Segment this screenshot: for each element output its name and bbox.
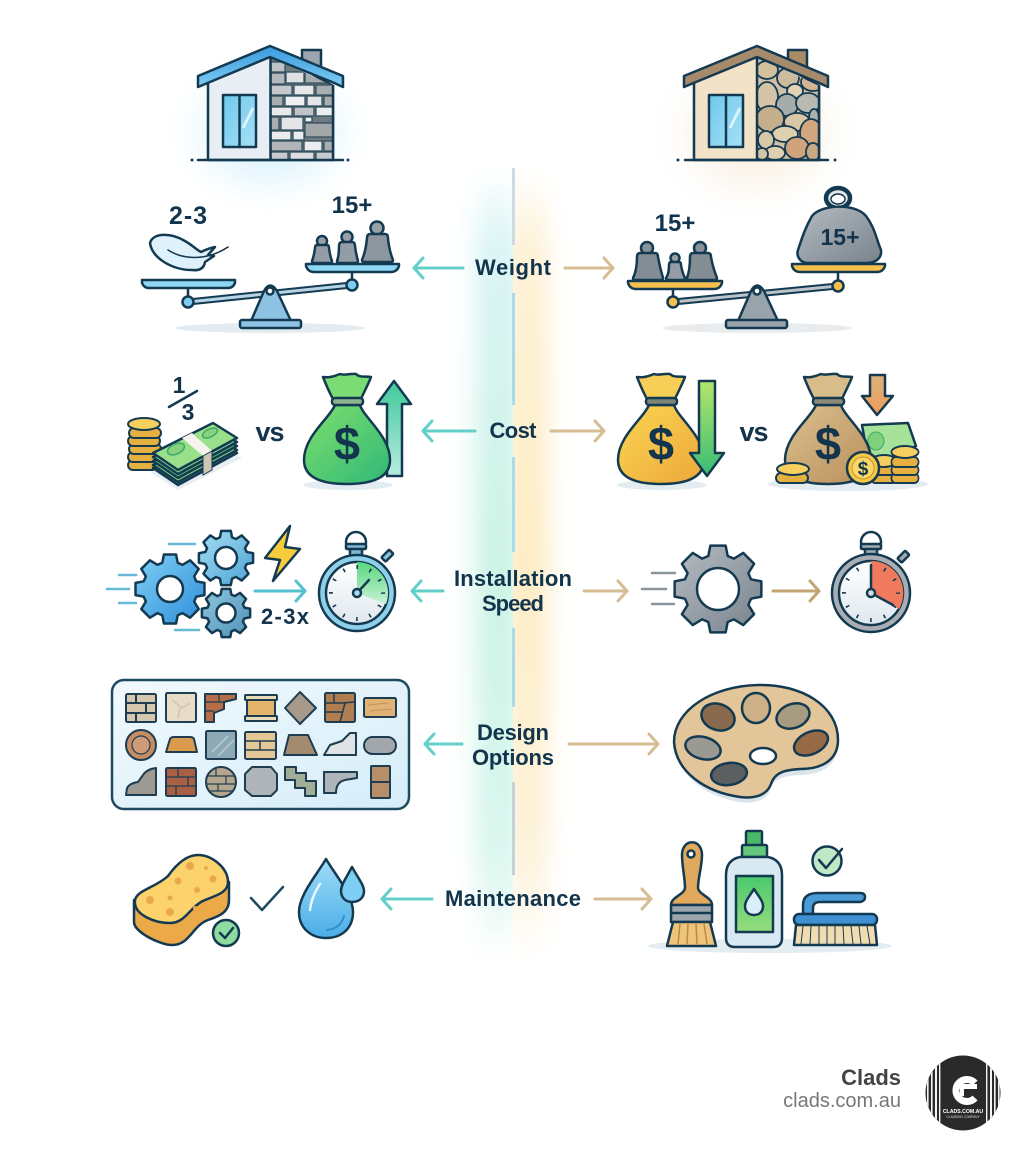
motion lines — [642, 573, 675, 604]
icon: coins left — [776, 463, 809, 483]
icon: upper gear — [199, 531, 253, 585]
arrows: maintenance — [382, 889, 651, 909]
label: Design Options: Design — [477, 720, 549, 745]
icon: check badge — [812, 846, 842, 876]
left pan — [142, 280, 235, 288]
pivots — [182, 272, 358, 308]
icon: medium weight — [337, 232, 358, 263]
right pan — [306, 264, 399, 272]
icon: gold money bag — [617, 374, 707, 490]
label: Weight: Weight — [475, 255, 552, 280]
arrows: cost — [423, 421, 604, 441]
chimney — [302, 50, 321, 76]
icon: large gear — [136, 555, 204, 623]
stones — [683, 693, 832, 787]
icon: stopwatch fast — [319, 532, 395, 631]
motion lines — [107, 544, 199, 630]
value: 2-3: 2-3 — [169, 202, 207, 230]
label: Installation Speed: Installation — [454, 566, 572, 591]
icon: coin stack — [128, 418, 161, 470]
icon: weight 2 — [666, 254, 685, 280]
icon: dollar coin — [847, 452, 879, 484]
roof — [684, 46, 828, 87]
icon: scrub brush — [794, 893, 877, 945]
icon: cash stack — [150, 423, 242, 490]
icon: lower gear — [202, 589, 250, 637]
icon: heavy stone weight: 15+ — [820, 224, 860, 250]
house: lightweight stone — [190, 46, 350, 162]
fulcrum — [726, 286, 787, 328]
glow: left house — [158, 38, 382, 222]
icon: large weight — [362, 222, 393, 262]
beam — [673, 286, 838, 302]
icon: heavy stone weight — [797, 188, 881, 263]
icon: orange arrow down — [862, 375, 893, 415]
label: Design Options — [472, 720, 554, 770]
icon: weight 3 — [687, 242, 717, 280]
icon: brown money bag — [768, 374, 928, 491]
text: vs: vs — [256, 417, 284, 447]
icon: water drops — [299, 859, 364, 938]
icon: green arrow up — [377, 381, 411, 476]
house: natural stone — [676, 46, 836, 162]
icon: coins right — [871, 446, 919, 483]
fraction: 1/3: 3 — [182, 399, 194, 425]
icon: brown money bag: $ — [815, 417, 841, 470]
tile row 2 — [126, 730, 396, 760]
logo: CLADDING COMPANY — [946, 1115, 980, 1119]
icon: feather — [150, 235, 228, 270]
left pan — [628, 281, 722, 289]
arrow — [255, 581, 305, 601]
window — [709, 95, 743, 147]
icon: green money bag: $ — [334, 417, 360, 470]
tile row 1 — [126, 692, 396, 724]
logo — [926, 1055, 1000, 1131]
arrow — [773, 581, 819, 601]
icon: bottle — [726, 831, 782, 947]
fraction: 1/3: 1 — [173, 372, 186, 398]
installation speed: left — [107, 526, 395, 637]
icon: small weight — [312, 236, 332, 263]
icon: grey gear — [675, 546, 761, 632]
cost: right side — [617, 374, 928, 491]
sponge and water: left maintenance — [134, 855, 364, 946]
icon: sponge — [134, 855, 229, 945]
ground — [676, 158, 836, 162]
label: Design Options: Options — [472, 745, 554, 770]
icon: paint brush — [667, 842, 716, 946]
fraction: 1/3 — [169, 372, 197, 425]
chimney — [788, 50, 807, 76]
cost: cheap side left — [128, 372, 411, 490]
logo: CLADS.COM.AU — [943, 1109, 983, 1115]
label: Maintenance: Maintenance — [445, 886, 581, 911]
arrows: design — [425, 734, 658, 754]
value: 2-3x: 2-3x — [261, 604, 310, 629]
fulcrum — [240, 286, 301, 328]
footer brand text: clads.com.au — [783, 1090, 901, 1112]
value: 15+: 15+ — [655, 210, 695, 237]
right pan — [792, 264, 885, 272]
footer brand text — [783, 1065, 901, 1112]
beam — [188, 285, 352, 302]
tile row 3 — [126, 766, 390, 798]
icon: dollar coin: $ — [858, 459, 869, 480]
icon: banknote — [862, 423, 916, 470]
installation speed: right — [642, 532, 910, 632]
right scale: weight — [628, 188, 885, 333]
text: vs: vs — [740, 417, 768, 447]
pivots — [668, 272, 844, 308]
label: Installation Speed: Speed — [482, 591, 544, 616]
icon: checkmark — [251, 887, 283, 910]
footer brand text: Clads — [841, 1065, 901, 1090]
left scale: weight — [142, 192, 399, 333]
cleaning tools: right maintenance — [648, 831, 892, 953]
central divider — [478, 168, 545, 960]
window — [223, 95, 256, 147]
arrows: weight — [414, 258, 613, 278]
icon: gold money bag: $ — [648, 417, 674, 470]
panel: design options grid — [112, 680, 409, 809]
glow: right house — [645, 37, 869, 227]
value: 15+: 15+ — [332, 192, 372, 219]
roof — [198, 46, 343, 87]
icon: lightning — [265, 526, 300, 581]
arrows: installation — [412, 581, 627, 601]
icon: stone palette — [674, 685, 838, 803]
icon: stopwatch slow — [832, 532, 910, 632]
ground — [190, 158, 350, 162]
icon: green arrow down — [690, 381, 724, 476]
label: Cost: Cost — [490, 418, 537, 443]
icon: green money bag — [303, 374, 393, 490]
label: Installation Speed — [454, 566, 572, 616]
icon: check badge — [213, 920, 239, 946]
icon: weight 1 — [633, 242, 663, 280]
